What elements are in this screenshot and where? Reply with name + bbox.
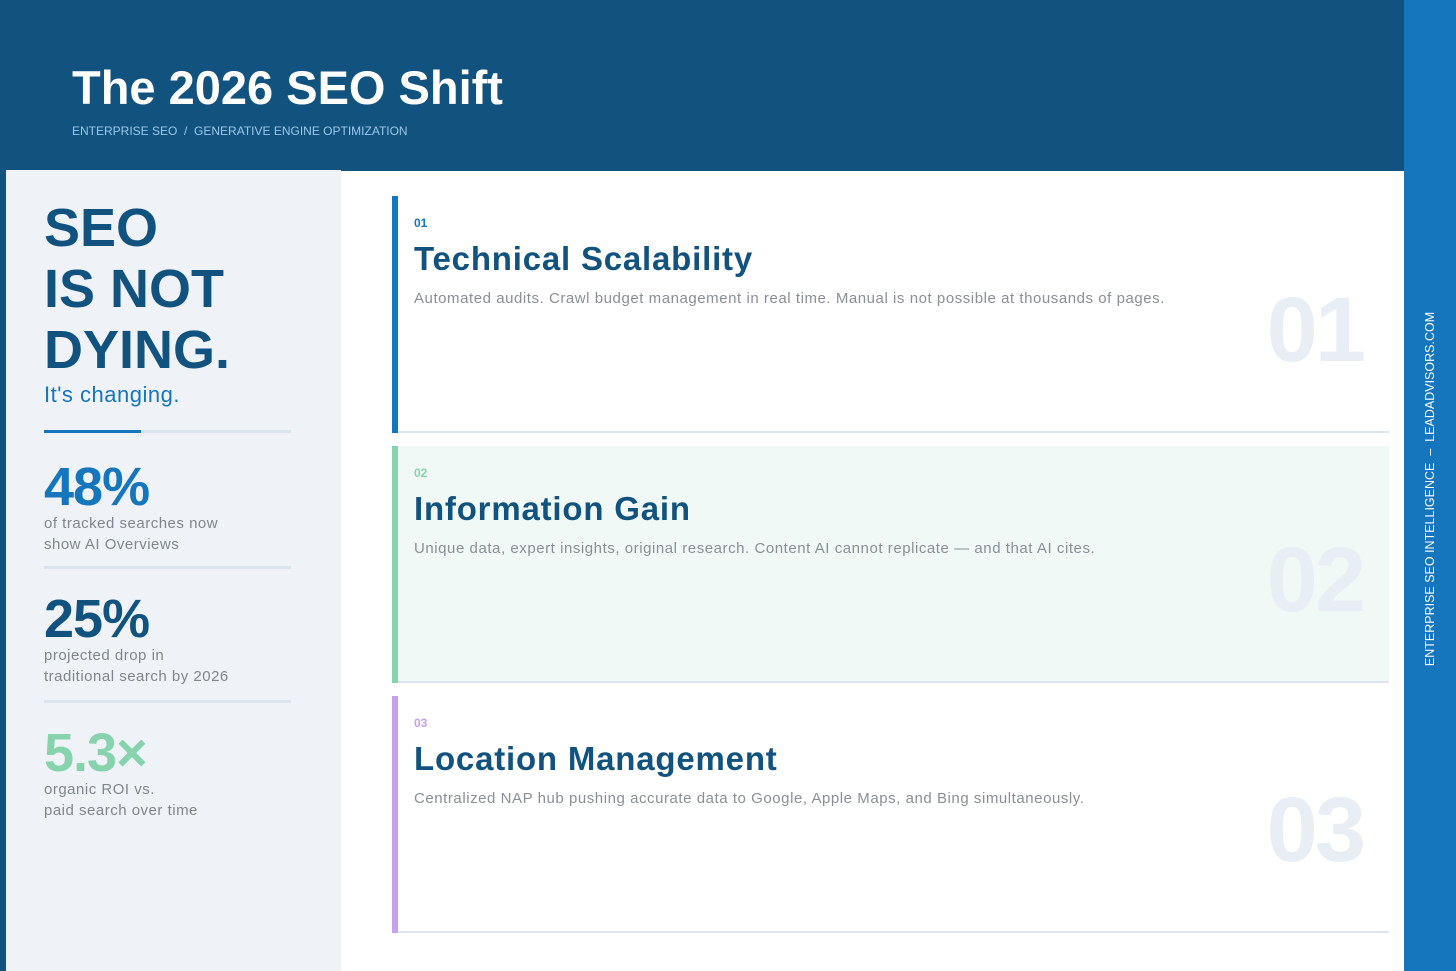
header [0, 0, 1404, 171]
vertical text: ENTERPRISE SEO INTELLIGENCE – LEADADVISORS.COM [1423, 312, 1437, 666]
stat 48%: of tracked searches now [44, 515, 218, 532]
headline: DYING. [44, 320, 230, 380]
stat 5.3x: 5.3× [44, 723, 147, 783]
left edge [0, 170, 6, 971]
card 03: 03 [414, 716, 427, 730]
stat 25%: 25% [44, 589, 149, 649]
card 03 [392, 696, 1389, 933]
card 02: Information Gain [414, 490, 691, 527]
card 01: Technical Scalability [414, 240, 753, 277]
card 03: Centralized NAP hub pushing accurate data to Google, Apple Maps, and Bing simultaneously. [414, 790, 1084, 807]
stat 5.3x: paid search over time [44, 802, 198, 819]
card 03: Location Management [414, 740, 778, 777]
stat 5.3x [44, 723, 198, 819]
card 02: 02 [1267, 529, 1363, 631]
card 03: 03 [1267, 779, 1363, 881]
card 01: 01 [1267, 279, 1363, 381]
card 01: 01 [414, 216, 427, 230]
card 02: 02 [414, 466, 427, 480]
right strip [1404, 0, 1456, 971]
card 02: Unique data, expert insights, original research. Content AI cannot replicate — and that AI cites. [414, 540, 1095, 557]
subtitle: ENTERPRISE SEO / GENERATIVE ENGINE OPTIMIZATION [72, 124, 408, 138]
card 01 [392, 196, 1389, 433]
headline: SEO [44, 198, 158, 258]
stat 25%: traditional search by 2026 [44, 668, 229, 685]
stat 25% [44, 589, 229, 685]
panel: left stats [6, 170, 341, 971]
headline [44, 198, 230, 380]
card 01: Automated audits. Crawl budget management in real time. Manual is not possible at thousands of pages. [414, 290, 1165, 307]
card 02 [392, 446, 1389, 683]
stat 48%: show AI Overviews [44, 536, 179, 553]
progress bar [44, 430, 291, 433]
stat 48% [44, 457, 218, 553]
stat 5.3x: organic ROI vs. [44, 781, 155, 798]
subheadline: It's changing. [44, 382, 180, 407]
stat 48%: 48% [44, 457, 149, 517]
stat 25%: projected drop in [44, 647, 164, 664]
headline: IS NOT [44, 259, 224, 319]
title: The 2026 SEO Shift [72, 61, 503, 114]
